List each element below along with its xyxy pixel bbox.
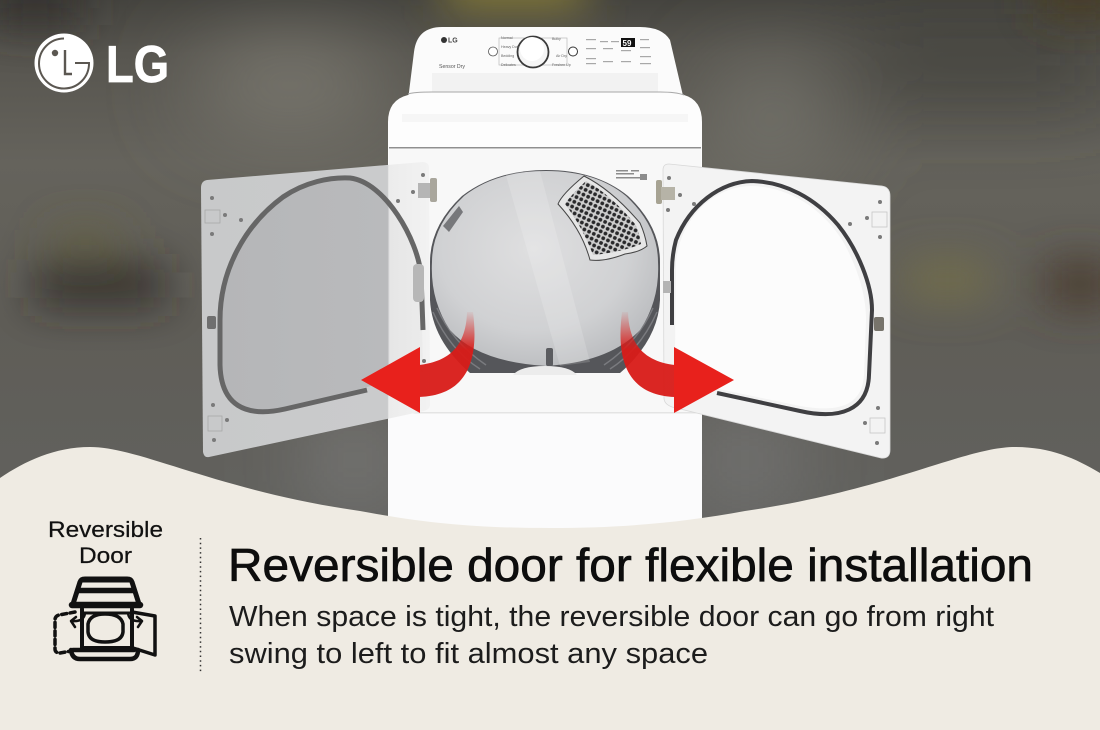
rear drum tab bbox=[546, 348, 553, 366]
right door hinge bracket bbox=[656, 180, 675, 204]
cycle selector dial: Bulky bbox=[552, 37, 561, 41]
left door open (translucent) bbox=[201, 162, 430, 457]
description bbox=[229, 601, 994, 670]
drum seal foot bbox=[513, 366, 577, 375]
icon label bbox=[48, 517, 163, 568]
left door latch bbox=[207, 316, 216, 329]
LG circle emblem bbox=[34, 34, 94, 92]
description: When space is tight, the reversible door can go from right bbox=[229, 601, 994, 633]
dotted divider bbox=[200, 538, 202, 673]
description: swing to left to fit almost any space bbox=[229, 638, 708, 670]
door frame bbox=[389, 149, 701, 413]
right door hinge bbox=[663, 281, 671, 293]
cycle selector dial: Bedding bbox=[501, 54, 514, 58]
cycle selector dial: Air Dry bbox=[556, 54, 567, 58]
power button bbox=[488, 47, 498, 56]
blurred background photo bbox=[0, 0, 1100, 540]
dryer console bbox=[408, 27, 684, 105]
right door latch bbox=[874, 317, 884, 331]
cycle selector dial bbox=[499, 36, 571, 68]
LG logo bbox=[34, 34, 169, 94]
red arrow left bbox=[361, 312, 474, 413]
dryer body bbox=[388, 27, 702, 530]
cycle selector dial: Heavy Duty bbox=[501, 45, 520, 49]
control options bbox=[586, 39, 651, 64]
Sensor Dry label: Sensor Dry bbox=[439, 64, 465, 70]
icon label: Door bbox=[79, 543, 133, 568]
dryer lid and cabinet bbox=[388, 93, 702, 530]
left door screws bbox=[210, 173, 426, 442]
left hinge bracket bbox=[418, 178, 437, 202]
hinge pockets bbox=[870, 212, 887, 433]
drum opening bbox=[430, 170, 660, 375]
cycle selector dial: Delicates bbox=[501, 63, 516, 67]
cabinet seam bbox=[389, 147, 701, 148]
console LG mark bbox=[441, 37, 458, 44]
right door open bbox=[656, 164, 890, 458]
specification label bbox=[616, 170, 647, 180]
drum back wall bbox=[432, 171, 658, 366]
console LG mark: LG bbox=[448, 38, 458, 44]
start button bbox=[568, 47, 578, 56]
cycle selector dial: Normal bbox=[501, 36, 513, 40]
left door hinge bbox=[413, 264, 424, 302]
icon: reversible door dryer bbox=[55, 579, 155, 659]
LG wordmark: LG bbox=[106, 36, 169, 94]
lower cabinet bbox=[388, 414, 702, 530]
right door screws bbox=[666, 176, 882, 445]
lint filter mesh bbox=[558, 176, 647, 260]
right door gasket bbox=[672, 181, 872, 414]
drum baffle bbox=[443, 206, 463, 232]
cream wave panel bbox=[0, 447, 1100, 730]
display: 59 bbox=[622, 39, 632, 48]
hinge pockets bbox=[205, 210, 222, 431]
display bbox=[621, 38, 635, 48]
left door gasket bbox=[220, 178, 423, 412]
drum baffle rings bbox=[433, 308, 657, 369]
cycle selector dial: Freshen Up bbox=[552, 63, 571, 67]
icon label: Reversible bbox=[48, 517, 163, 542]
heading: Reversible door for flexible installation bbox=[228, 539, 1033, 591]
red arrow right bbox=[620, 312, 734, 413]
